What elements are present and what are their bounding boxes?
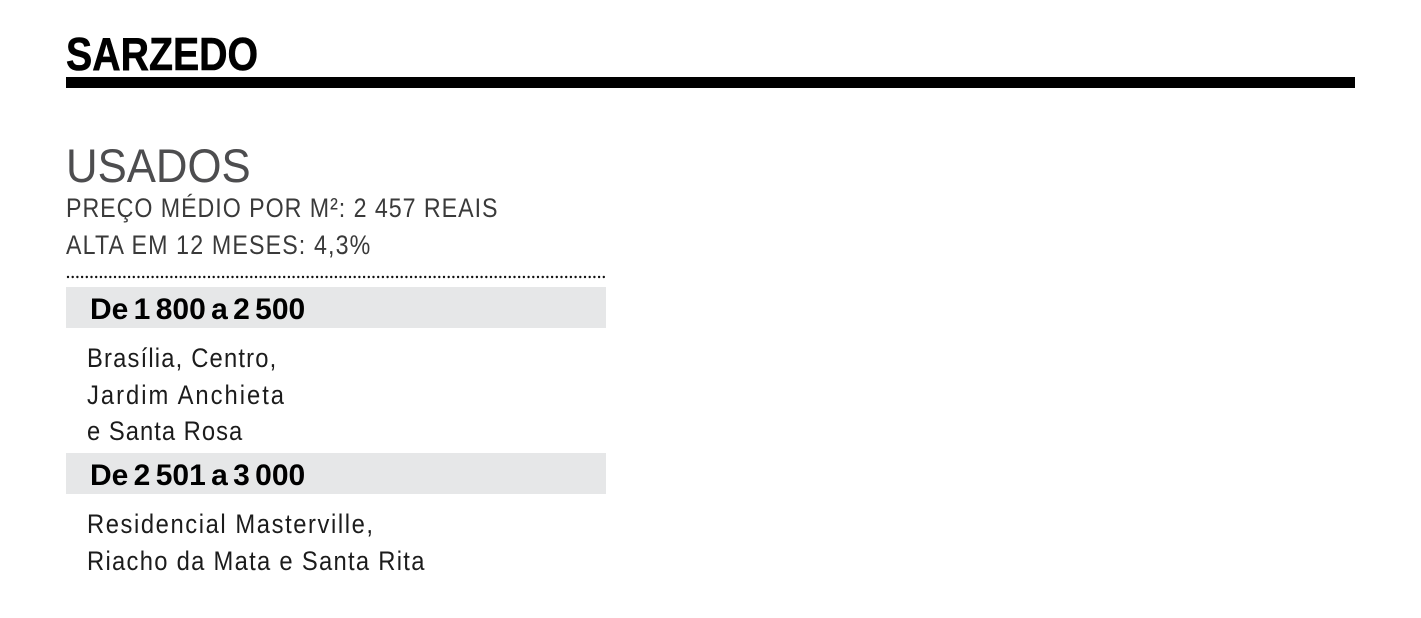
neighbourhoods 1: Jardim Anchieta [87, 380, 286, 410]
neighbourhoods 2: Riacho da Mata e Santa Rita [87, 546, 426, 576]
neighbourhoods 1: e Santa Rosa [87, 416, 243, 446]
price band 1 [66, 287, 606, 328]
section heading: USADOS [66, 139, 251, 192]
price band 2 [66, 453, 606, 494]
annual rise: ALTA EM 12 MESES: 4,3% [66, 230, 371, 260]
panel: usados [66, 139, 606, 576]
neighbourhoods 1 [87, 343, 286, 446]
neighbourhoods 1: Brasília, Centro, [87, 343, 277, 373]
band label 2: De 2 501 a 3 000 [90, 459, 305, 492]
band label 1: De 1 800 a 2 500 [90, 293, 305, 326]
neighbourhoods 2: Residencial Masterville, [87, 509, 375, 539]
title: SARZEDO [66, 28, 258, 80]
average price: PREÇO MÉDIO POR M²: 2 457 REAIS [66, 193, 498, 223]
neighbourhoods 2 [87, 509, 426, 576]
